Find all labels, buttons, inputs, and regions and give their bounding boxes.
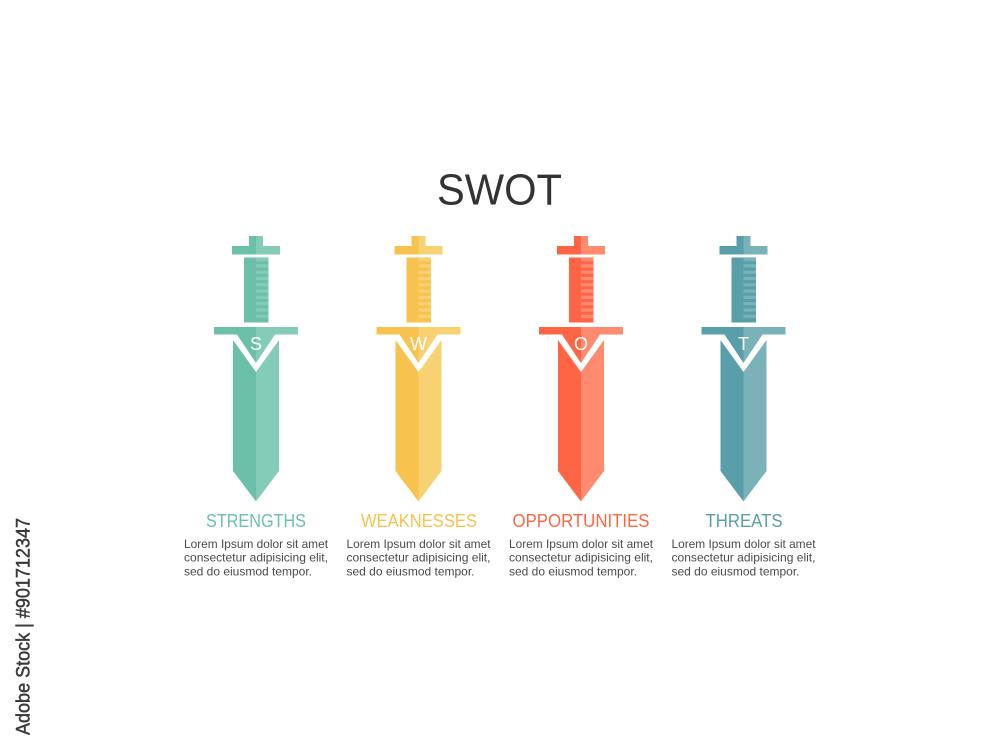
text: strengths description: consectetur adipisicing elit,	[184, 550, 328, 564]
text: strengths description: Lorem Ipsum dolor sit amet	[184, 537, 329, 551]
text: opportunities description: sed do eiusmod tempor.	[509, 564, 637, 578]
heading: threats: THREATS	[706, 511, 782, 531]
icon: threats sword	[702, 236, 786, 502]
panel: strengths	[184, 236, 329, 578]
text: threats description: consectetur adipisicing elit,	[672, 550, 816, 564]
text: threats description: Lorem Ipsum dolor sit amet	[672, 537, 816, 551]
panel: weaknesses	[346, 236, 491, 578]
text: opportunities description: consectetur adipisicing elit,	[509, 550, 653, 564]
icon: strengths sword: S	[250, 334, 262, 354]
panel: opportunities	[509, 236, 654, 578]
icon: weaknesses sword: W	[410, 334, 427, 354]
heading: strengths: STRENGTHS	[206, 511, 306, 531]
icon: opportunities sword: O	[574, 334, 588, 354]
text: weaknesses description: Lorem Ipsum dolor sit amet	[346, 537, 491, 551]
heading: weaknesses: WEAKNESSES	[361, 511, 477, 531]
icon: weaknesses sword	[376, 236, 460, 502]
panel: threats	[672, 236, 816, 578]
icon: threats sword: T	[738, 334, 749, 354]
icon: opportunities sword	[539, 236, 623, 502]
text: threats description: sed do eiusmod tempor.	[672, 564, 800, 578]
stock id text: Adobe Stock | #901712347	[14, 518, 34, 735]
heading: opportunities: OPPORTUNITIES	[512, 511, 650, 531]
text: weaknesses description: sed do eiusmod tempor.	[346, 564, 474, 578]
text: strengths description: sed do eiusmod tempor.	[184, 564, 312, 578]
text: weaknesses description: consectetur adipisicing elit,	[346, 550, 490, 564]
title: SWOT	[437, 165, 562, 214]
icon: strengths sword	[214, 236, 298, 502]
text: opportunities description: Lorem Ipsum dolor sit amet	[509, 537, 654, 551]
